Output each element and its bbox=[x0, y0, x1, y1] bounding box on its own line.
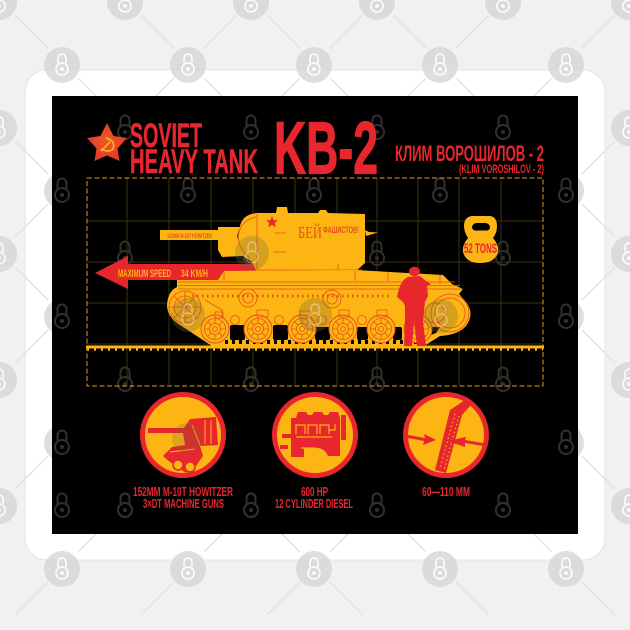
caption: firepower bbox=[133, 484, 233, 511]
arrow: maximum speed: MAXIMUM SPEED bbox=[118, 268, 171, 280]
arrow: maximum speed bbox=[95, 256, 258, 289]
tank turret bbox=[218, 207, 378, 272]
sticker sheet bbox=[25, 70, 605, 560]
arrow: maximum speed: 34 KM/H bbox=[181, 268, 208, 280]
icon: gun and turret bbox=[142, 394, 224, 476]
caption: engine bbox=[275, 484, 353, 511]
caption: engine: 12 CYLINDER DIESEL bbox=[275, 496, 353, 511]
panel: engine bbox=[274, 394, 356, 511]
icon: armor thickness bbox=[406, 394, 486, 476]
icon: kettlebell 52 tons: 52 TONS bbox=[464, 240, 497, 256]
icon: kettlebell 52 tons bbox=[463, 216, 498, 263]
blueprint grid bbox=[87, 178, 543, 386]
panel: firepower bbox=[133, 394, 233, 511]
caption: firepower: 152MM M-10T HOWITZER bbox=[133, 484, 233, 499]
icon: soviet star bbox=[87, 123, 127, 161]
heading: soviet heavy tank: HEAVY TANK bbox=[130, 143, 258, 181]
panel: armor bbox=[406, 394, 486, 499]
subtitle: transliteration: (KLIM VOROSHILOV - 2) bbox=[459, 164, 544, 176]
ground line bbox=[86, 346, 544, 350]
dashed frame bbox=[87, 178, 543, 386]
gun barrel bbox=[160, 230, 220, 240]
tank turret: ФАШИСТОВ! bbox=[323, 225, 359, 236]
heading: soviet heavy tank bbox=[130, 117, 258, 181]
tank hull and tracks bbox=[167, 270, 470, 346]
tank turret: БЕЙ bbox=[298, 223, 322, 242]
tank illustration bbox=[160, 207, 470, 346]
watermark locks on black panel bbox=[54, 114, 574, 518]
watermark discs over tank bbox=[171, 236, 458, 333]
sprocket, idler and rollers bbox=[169, 289, 469, 332]
black panel bbox=[52, 96, 578, 534]
heading: soviet heavy tank: SOVIET bbox=[130, 117, 202, 155]
soldier silhouette bbox=[397, 267, 431, 346]
caption: armor: 60—110 MM bbox=[422, 484, 470, 499]
title: KB-2: KB-2 bbox=[274, 106, 378, 190]
icon: engine bbox=[274, 394, 356, 476]
road wheels bbox=[201, 315, 432, 343]
caption: firepower: 3×DT MACHINE GUNS bbox=[143, 496, 224, 511]
caption: engine: 600 HP bbox=[301, 484, 328, 499]
gun barrel: 152MM M-10T HOWITZER bbox=[167, 233, 212, 240]
